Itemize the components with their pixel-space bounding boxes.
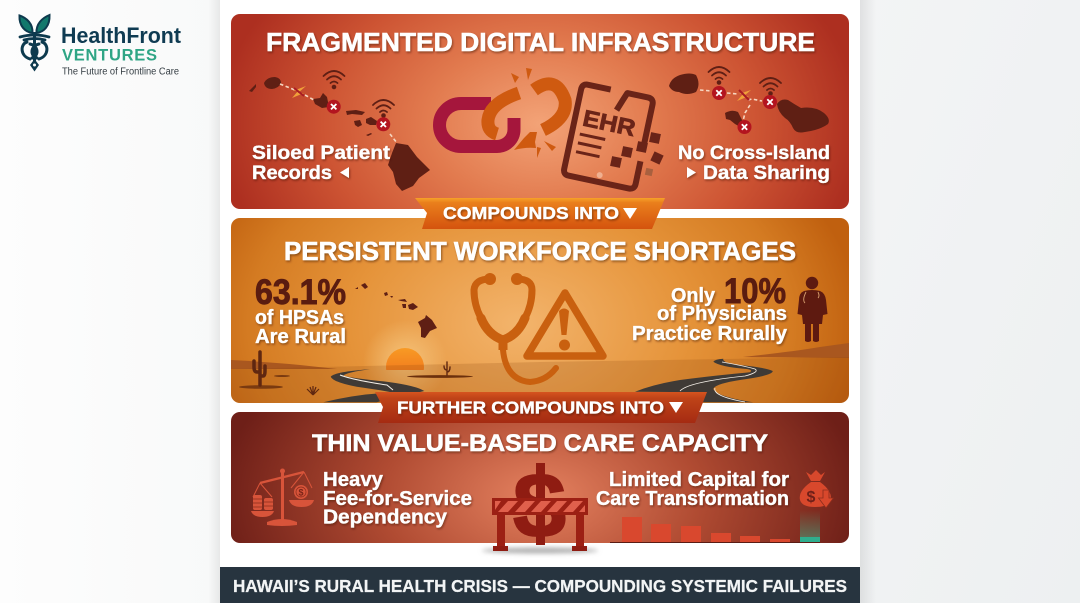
icon: unbalanced scale: $ xyxy=(298,488,304,498)
logo tagline: The Future of Frontline Care xyxy=(62,66,179,78)
stat label xyxy=(632,302,788,345)
heading: PERSISTENT WORKFORCE SHORTAGES xyxy=(284,238,796,266)
icon: x marker xyxy=(738,120,752,134)
icon: x marker xyxy=(327,100,341,114)
ribbon: compounds into xyxy=(415,198,665,229)
heading: FRAGMENTED DIGITAL INFRASTRUCTURE xyxy=(266,27,815,57)
label: heavy fee-for-service dependency: Dependency xyxy=(323,506,448,528)
icon: unbalanced scale xyxy=(251,468,314,526)
stat label: of Physicians xyxy=(657,302,787,325)
panel: fragmented digital infrastructure xyxy=(231,14,849,209)
panel background xyxy=(231,412,849,543)
logo wordmark: HealthFront xyxy=(61,23,182,48)
stat label: Are Rural xyxy=(255,325,346,348)
EHR label: EHR xyxy=(581,105,638,141)
icon: wifi xyxy=(760,78,781,95)
label: no cross-island data sharing: Data Sharing xyxy=(703,162,830,184)
icon: small cactus xyxy=(444,362,450,375)
icon: wifi xyxy=(324,71,344,88)
icon: cactus xyxy=(254,352,265,385)
panel: persistent workforce shortages xyxy=(231,218,849,404)
panel background xyxy=(231,14,849,209)
label: siloed patient records: Records xyxy=(252,162,332,184)
icon: broken chain xyxy=(440,68,565,158)
panel background xyxy=(231,218,849,403)
stat label xyxy=(255,306,346,348)
label: limited capital for care transformation: Care Transformation xyxy=(596,488,789,510)
icon: desert shrub xyxy=(307,386,319,395)
logo: HealthFront Ventures xyxy=(19,15,182,78)
label: no cross-island data sharing xyxy=(678,142,830,184)
heading: THIN VALUE-BASED CARE CAPACITY xyxy=(312,430,768,457)
stat prefix: Only xyxy=(671,284,716,307)
mini Hawaii map xyxy=(355,283,437,338)
icon: money bag with down arrow xyxy=(800,470,834,508)
label: heavy fee-for-service dependency: Fee-for-Service xyxy=(323,488,472,510)
right island map with broken links xyxy=(669,67,829,134)
stat: only 10% of physicians practice rurally xyxy=(632,272,788,345)
icon: x marker xyxy=(376,117,390,131)
icon: dollar sign behind road barrier xyxy=(482,455,598,557)
icon: cracked EHR tablet xyxy=(563,84,664,190)
road: left xyxy=(323,369,424,402)
ribbon text: FURTHER COMPOUNDS INTO xyxy=(397,398,664,418)
label: no cross-island data sharing: No Cross-Island xyxy=(678,142,830,164)
ribbon: further compounds into xyxy=(375,392,707,423)
barrier shadow xyxy=(482,548,598,554)
ribbon text: COMPOUNDS INTO xyxy=(443,203,619,223)
stat number: 10% xyxy=(724,272,786,311)
stat: 63.1% of HPSAs are rural xyxy=(255,273,346,348)
label: heavy fee-for-service dependency xyxy=(323,469,472,528)
icon: caduceus with leaves xyxy=(19,15,50,72)
icon: stethoscope xyxy=(474,273,556,382)
desert landscape xyxy=(231,320,849,404)
stat label: Practice Rurally xyxy=(632,322,788,345)
icon: money bag with down arrow: $ xyxy=(806,489,816,506)
road: right xyxy=(635,359,773,402)
label: siloed patient records xyxy=(252,142,391,184)
icon: x marker xyxy=(712,86,726,100)
label: siloed patient records: Siloed Patient xyxy=(252,142,391,164)
label: heavy fee-for-service dependency: Heavy xyxy=(323,469,384,491)
footer bar xyxy=(220,567,860,603)
icon: down triangle xyxy=(623,208,637,219)
icon: wifi xyxy=(708,67,730,84)
icon: wifi xyxy=(373,100,394,117)
stat label: of HPSAs xyxy=(255,306,344,329)
label: limited capital for care transformation: Limited Capital for xyxy=(609,469,789,491)
panel: thin value-based care capacity xyxy=(231,412,849,557)
label: limited capital for care transformation xyxy=(596,469,789,510)
icon: x marker xyxy=(763,95,777,109)
dollar sign: $ xyxy=(513,455,566,557)
icon: down triangle xyxy=(669,402,683,413)
barrier xyxy=(497,513,505,547)
footer text: HAWAII’S RURAL HEALTH CRISIS — COMPOUNDING SYSTEMIC FAILURES xyxy=(233,576,847,596)
icon: physician xyxy=(798,277,828,342)
stat number: 63.1% xyxy=(255,273,346,312)
left island map with broken links xyxy=(249,71,430,191)
declining capital bars xyxy=(610,510,820,542)
logo sub-wordmark: VENTURES xyxy=(62,46,157,64)
icon: warning triangle xyxy=(527,293,603,356)
